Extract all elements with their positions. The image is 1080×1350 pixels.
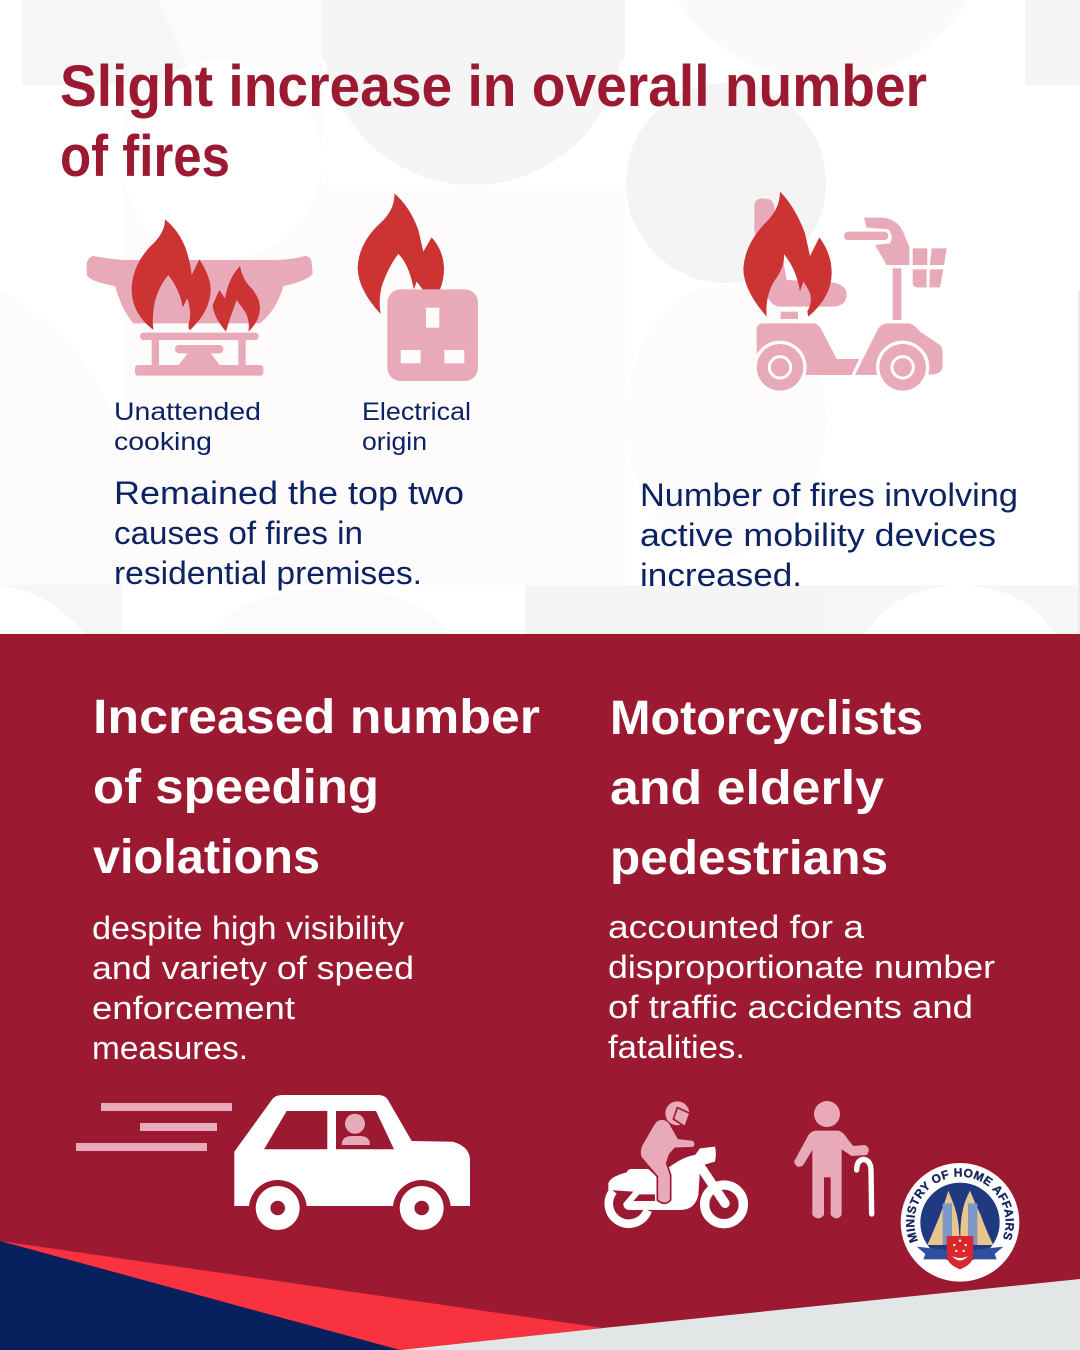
- icon: flame on mobility scooter: [743, 192, 947, 394]
- heading: speeding violations: [93, 691, 540, 884]
- heading: speeding violations: violations: [93, 831, 320, 884]
- text: top two causes: causes of fires in: [114, 515, 363, 551]
- heading: speeding violations: Increased number: [93, 691, 540, 744]
- title: of fires: [60, 124, 230, 189]
- text: traffic accidents and fatalities: of traffic accidents and: [608, 989, 973, 1025]
- icon: speeding car: [76, 1095, 470, 1230]
- background geometric pattern: [0, 0, 1080, 735]
- text: active mobility devices: increased.: [640, 557, 802, 593]
- text: top two causes: Remained the top two: [114, 475, 464, 511]
- text: speed enforcement measures: [92, 910, 414, 1066]
- label: unattended cooking: Unattended: [114, 398, 261, 426]
- title: [60, 54, 927, 189]
- text: active mobility devices: [640, 477, 1018, 593]
- heading: speeding violations: of speeding: [93, 761, 379, 814]
- text: traffic accidents and fatalities: disproportionate number: [608, 949, 995, 985]
- label: electrical origin: origin: [362, 428, 427, 456]
- heading: motorcyclists and elderly pedestrians: pedestrians: [610, 832, 888, 885]
- logo: Ministry of Home Affairs crest: [900, 1163, 1020, 1282]
- text: speed enforcement measures: enforcement: [92, 990, 295, 1026]
- label: unattended cooking: [114, 398, 261, 456]
- heading: motorcyclists and elderly pedestrians: and elderly: [610, 762, 884, 815]
- panel: road safety: [0, 634, 1080, 1350]
- text: active mobility devices: Number of fires involving: [640, 477, 1018, 513]
- text: traffic accidents and fatalities: fatalities.: [608, 1029, 745, 1065]
- text: top two causes: [114, 475, 464, 591]
- text: traffic accidents and fatalities: accounted for a: [608, 909, 864, 945]
- heading: motorcyclists and elderly pedestrians: Motorcyclists: [610, 692, 923, 745]
- title: Slight increase in overall number: [60, 54, 927, 119]
- logo: Ministry of Home Affairs crest: MINISTRY OF HOME AFFAIRS: [906, 1168, 1014, 1244]
- icon: elderly pedestrian with cane: [794, 1101, 872, 1218]
- text: traffic accidents and fatalities: [608, 909, 995, 1065]
- text: speed enforcement measures: despite high visibility: [92, 910, 404, 946]
- icon: flame on electrical socket: [358, 193, 478, 381]
- heading: motorcyclists and elderly pedestrians: [610, 692, 923, 885]
- label: unattended cooking: cooking: [114, 428, 212, 456]
- text: speed enforcement measures: measures.: [92, 1030, 248, 1066]
- bottom corner shapes: [0, 1241, 1080, 1350]
- icon: flames on cooking wok: [87, 219, 313, 376]
- text: speed enforcement measures: and variety of speed: [92, 950, 414, 986]
- label: electrical origin: [362, 398, 471, 456]
- text: active mobility devices: active mobility devices: [640, 517, 996, 553]
- text: top two causes: residential premises.: [114, 555, 422, 591]
- label: electrical origin: Electrical: [362, 398, 471, 426]
- icon: motorcyclist: [608, 1101, 743, 1224]
